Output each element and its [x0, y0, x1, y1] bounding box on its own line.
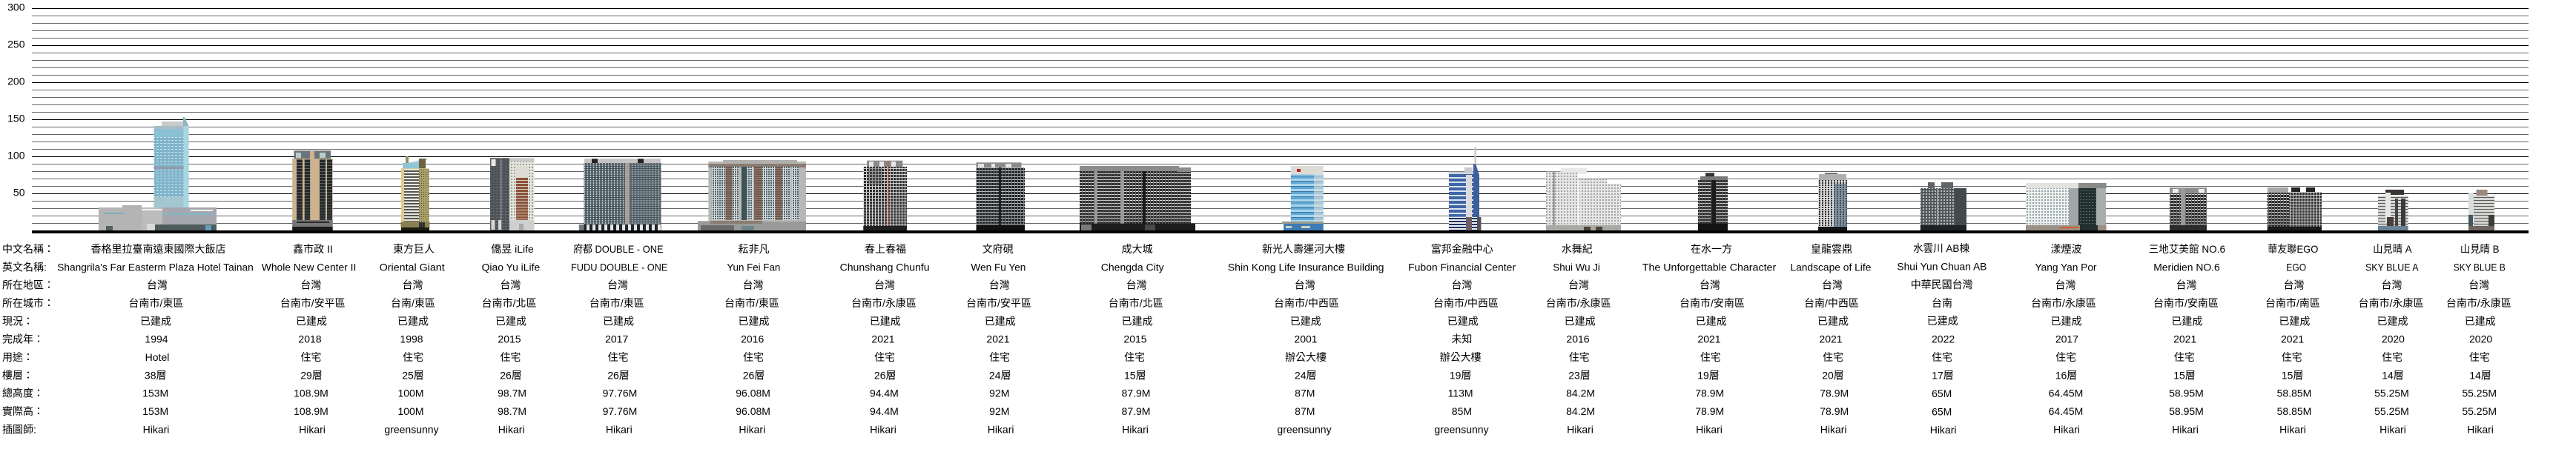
data column: 文府硯: 92M	[989, 387, 1009, 399]
data column: 山見晴 A: 台灣	[2382, 279, 2402, 291]
data column: 東方巨人: 1998	[400, 333, 423, 345]
building: Landscape of Life	[1818, 173, 1847, 230]
data column: 水舞紀: 2016	[1566, 333, 1590, 345]
data column: 成大城: 87.9M	[1122, 405, 1150, 417]
data column: 新光人壽運河大樓: 台南市/中西區	[1274, 297, 1339, 309]
data column: 耘非凡: 台灣	[743, 279, 764, 291]
table row labels: 插圖師:	[2, 423, 36, 435]
data column: 香格里拉臺南遠東國際大飯店: Shangrila's Far Easterm Plaza Hotel Tainan	[57, 261, 254, 273]
data column: 新光人壽運河大樓	[1228, 243, 1384, 435]
data column: 三地艾美館 NO.6: 已建成	[2171, 315, 2202, 327]
data column: 春上春福: 94.4M	[870, 387, 899, 399]
data column: 皇龍雲鼎: 78.9M	[1820, 387, 1849, 399]
data column: 華友聯EGO: 華友聯EGO	[2268, 243, 2318, 255]
data column: 春上春福: 26層	[874, 369, 896, 381]
data column: 府都 DOUBLE - ONE: 台灣	[607, 279, 628, 291]
data column: 富邦金融中心: 19層	[1450, 369, 1471, 381]
data column: 漾煙波: Yang Yan Por	[2035, 261, 2097, 273]
data column: 春上春福: 94.4M	[870, 405, 899, 417]
data column: 水舞紀: Hikari	[1567, 423, 1594, 435]
data column: 山見晴 B: 台灣	[2468, 279, 2489, 291]
data column: 耘非凡: Hikari	[739, 423, 765, 435]
data column: 皇龍雲鼎: 已建成	[1817, 315, 1849, 327]
data column: 漾煙波	[2031, 243, 2097, 435]
table row labels: 樓層：	[2, 369, 33, 381]
data column: 鑫市政 II: 住宅	[300, 351, 321, 363]
ground line	[32, 230, 2529, 233]
building: Shin Kong Life Insurance	[1282, 166, 1324, 230]
data column: 僑昱 iLife: 僑昱 iLife	[491, 243, 534, 255]
data column: 鑫市政 II: 108.9M	[294, 405, 328, 417]
building: Whole New Center II	[292, 150, 333, 230]
table row labels: 實際高：	[2, 405, 44, 417]
data column: 水舞紀	[1546, 243, 1611, 435]
data column: 香格里拉臺南遠東國際大飯店: 38層	[145, 369, 166, 381]
data column: 成大城: 住宅	[1124, 351, 1145, 363]
table row labels: 所在地區：	[2, 279, 54, 291]
data column: 在水一方: 2021	[1697, 333, 1721, 345]
data column: 水雲川 AB棟: 住宅	[1932, 351, 1952, 363]
data column: 華友聯EGO: 台南市/南區	[2265, 297, 2320, 309]
data column: 春上春福: 春上春福	[865, 243, 906, 255]
data column: 文府硯: 2021	[986, 333, 1010, 345]
data column: 水舞紀: 住宅	[1569, 351, 1590, 363]
building: Chunshang Chunfu	[863, 161, 907, 230]
data column: 水舞紀: 84.2M	[1566, 387, 1595, 399]
data column: 三地艾美館 NO.6	[2149, 243, 2225, 435]
data column: 三地艾美館 NO.6: 2021	[2173, 333, 2196, 345]
y axis labels: 150	[7, 112, 25, 124]
data column: 山見晴 A	[2359, 243, 2424, 435]
data column: 皇龍雲鼎	[1790, 243, 1872, 435]
data column: 山見晴 A: 14層	[2382, 369, 2404, 381]
table row labels: 所在城市：	[2, 297, 54, 309]
data column: 山見晴 A: 山見晴 A	[2373, 243, 2412, 255]
data column: 水雲川 AB棟: 17層	[1932, 370, 1954, 382]
data column: 漾煙波: 2017	[2055, 333, 2078, 345]
data column: 皇龍雲鼎: 20層	[1822, 369, 1844, 381]
data column: 華友聯EGO: 58.85M	[2277, 387, 2311, 399]
data column: 成大城: Hikari	[1122, 423, 1149, 435]
data column: 水雲川 AB棟: Hikari	[1930, 424, 1956, 436]
data column: 山見晴 B: 住宅	[2469, 351, 2490, 363]
building: Fubon Financial Center	[1449, 147, 1481, 230]
data column: 東方巨人: 已建成	[397, 315, 429, 327]
data column: 水舞紀: Shui Wu Ji	[1553, 261, 1600, 273]
data column: 春上春福: 台灣	[874, 279, 895, 291]
building: Meridien NO.6	[2170, 187, 2207, 230]
data column: 水舞紀: 台灣	[1568, 279, 1589, 291]
data column: 東方巨人: 100M	[397, 405, 424, 417]
data column: 漾煙波: 16層	[2055, 369, 2077, 381]
data column: 東方巨人: Oriental Giant	[380, 261, 445, 273]
data column: 文府硯: 已建成	[985, 315, 1016, 327]
data column: 華友聯EGO	[2265, 243, 2320, 435]
building: Chengda City	[1080, 166, 1195, 230]
data column: 皇龍雲鼎: 皇龍雲鼎	[1811, 243, 1852, 255]
data column: 春上春福: 台南市/永康區	[851, 297, 917, 309]
data column: 在水一方: 78.9M	[1695, 405, 1724, 417]
building: Wen Fu Yen	[976, 162, 1025, 230]
data column: 富邦金融中心: 富邦金融中心	[1431, 243, 1493, 255]
table row labels: 現況：	[2, 315, 33, 327]
data column: 三地艾美館 NO.6: 台灣	[2176, 279, 2196, 291]
data column: 富邦金融中心: 85M	[1452, 405, 1472, 417]
data column: 漾煙波: 台灣	[2055, 279, 2076, 291]
data column: 新光人壽運河大樓: 新光人壽運河大樓	[1262, 243, 1345, 255]
building: Shui Wu Ji	[1546, 168, 1621, 230]
data column: 水雲川 AB棟	[1897, 242, 1987, 436]
data column: 三地艾美館 NO.6: 住宅	[2174, 351, 2195, 363]
data column: 府都 DOUBLE - ONE: 台南市/東區	[589, 297, 644, 309]
data column: 水舞紀: 台南市/永康區	[1546, 297, 1611, 309]
data column: 富邦金融中心: 未知	[1451, 333, 1472, 345]
y axis labels: 200	[7, 75, 25, 87]
data column: 耘非凡: Yun Fei Fan	[727, 261, 780, 273]
table row labels: 英文名稱:	[2, 261, 47, 273]
data column: 僑昱 iLife: Qiao Yu iLife	[482, 261, 540, 273]
data column: 香格里拉臺南遠東國際大飯店: 台南市/東區	[129, 297, 183, 309]
data column: 僑昱 iLife: 98.7M	[498, 387, 526, 399]
data column: 僑昱 iLife: 26層	[500, 369, 522, 381]
data column: 華友聯EGO: Hikari	[2279, 423, 2306, 435]
data column: 府都 DOUBLE - ONE: Hikari	[606, 423, 633, 435]
data column: 文府硯: 文府硯	[982, 243, 1014, 255]
data column: 在水一方: 19層	[1697, 369, 1720, 381]
data column: 山見晴 A: 台南市/永康區	[2359, 297, 2424, 309]
data column: 鑫市政 II: 2018	[298, 333, 322, 345]
data column: 新光人壽運河大樓: 87M	[1295, 405, 1315, 417]
data column: 東方巨人	[380, 243, 445, 435]
data column: 水雲川 AB棟: 65M	[1932, 387, 1952, 399]
data column: 香格里拉臺南遠東國際大飯店: 已建成	[140, 315, 171, 327]
data column: 春上春福: 2021	[871, 333, 895, 345]
data column: 香格里拉臺南遠東國際大飯店: 153M	[142, 405, 168, 417]
data column: 耘非凡: 住宅	[743, 351, 764, 363]
y axis labels: 50	[13, 186, 25, 198]
data column: 山見晴 B: 2020	[2469, 333, 2492, 345]
data column: 水雲川 AB棟: 中華民國台灣	[1911, 279, 1973, 290]
data column: 府都 DOUBLE - ONE: 2017	[605, 333, 628, 345]
data column: 富邦金融中心: 台南市/中西區	[1433, 297, 1499, 309]
data column: 山見晴 A: 已建成	[2377, 315, 2408, 327]
data column: 新光人壽運河大樓: 台灣	[1295, 279, 1315, 291]
data column: 山見晴 B: 55.25M	[2462, 405, 2497, 417]
data column: 耘非凡: 台南市/東區	[724, 297, 779, 309]
data column: 水雲川 AB棟: 水雲川 AB棟	[1913, 242, 1969, 254]
building: FUDU DOUBLE - ONE	[579, 159, 661, 230]
data column: 山見晴 A: 55.25M	[2374, 387, 2409, 399]
data column: 文府硯: Wen Fu Yen	[971, 261, 1026, 273]
data column: 新光人壽運河大樓: 辦公大樓	[1285, 351, 1327, 363]
data column: 漾煙波: 漾煙波	[2051, 243, 2082, 255]
height grid lines	[32, 8, 2529, 224]
building: Yun Fei Fan	[698, 160, 806, 230]
data column: 成大城: 2015	[1123, 333, 1147, 345]
data column: 在水一方	[1642, 243, 1777, 435]
data column: 香格里拉臺南遠東國際大飯店: 153M	[142, 387, 168, 399]
data column: 僑昱 iLife: 住宅	[500, 351, 521, 363]
building: The Unforgettable Character	[1698, 173, 1728, 230]
data column: 香格里拉臺南遠東國際大飯店: 台灣	[147, 279, 168, 291]
building: SKY BLUE A	[2378, 190, 2408, 230]
data column: 春上春福: Hikari	[870, 423, 896, 435]
data column: 東方巨人: 東方巨人	[393, 243, 435, 255]
y axis labels	[7, 1, 25, 198]
data column: 三地艾美館 NO.6: 15層	[2173, 369, 2196, 381]
data column: 在水一方: 台南市/安南區	[1680, 297, 1745, 309]
data column: 在水一方: The Unforgettable Character	[1642, 261, 1777, 273]
data column: 皇龍雲鼎: Landscape of Life	[1790, 261, 1872, 273]
data column: 僑昱 iLife: 98.7M	[498, 405, 526, 417]
data column: 華友聯EGO: EGO	[2286, 261, 2306, 273]
data column: 文府硯: 92M	[989, 405, 1009, 417]
data column: 華友聯EGO: 15層	[2282, 369, 2303, 381]
data column: 富邦金融中心: 113M	[1448, 387, 1473, 399]
data column: 成大城: 成大城	[1121, 243, 1152, 255]
data column: 富邦金融中心: 台灣	[1451, 279, 1472, 291]
data column: 鑫市政 II	[262, 243, 356, 435]
data column: 鑫市政 II: Hikari	[299, 423, 326, 435]
data column: 耘非凡: 96.08M	[736, 387, 770, 399]
y axis labels: 100	[7, 149, 25, 161]
data column: 僑昱 iLife: 台南市/北區	[482, 297, 537, 309]
data column: 三地艾美館 NO.6: 三地艾美館 NO.6	[2149, 243, 2225, 255]
y axis labels: 300	[7, 1, 25, 13]
data column: 水舞紀: 84.2M	[1566, 405, 1595, 417]
data column: 成大城: 87.9M	[1122, 387, 1150, 399]
data column: 成大城: Chengda City	[1101, 261, 1164, 273]
data column: 山見晴 B	[2446, 243, 2511, 435]
data column: 水舞紀: 水舞紀	[1562, 243, 1593, 255]
data column: 在水一方: 在水一方	[1691, 243, 1732, 255]
data column: 山見晴 A: 住宅	[2382, 351, 2402, 363]
data column: 漾煙波: 已建成	[2051, 315, 2082, 327]
data column: 漾煙波: 台南市/永康區	[2031, 297, 2096, 309]
data column: 山見晴 B: 55.25M	[2462, 387, 2497, 399]
data column: 東方巨人: 台南/東區	[391, 297, 435, 309]
data column: 東方巨人: 住宅	[403, 351, 423, 363]
data column: 文府硯: 住宅	[989, 351, 1010, 363]
data column: 僑昱 iLife: 2015	[498, 333, 521, 345]
data column: 香格里拉臺南遠東國際大飯店: Hotel	[145, 351, 169, 363]
data column: 東方巨人: greensunny	[384, 423, 439, 435]
data column: 文府硯: 台灣	[989, 279, 1010, 291]
data column: 皇龍雲鼎: 台灣	[1822, 279, 1843, 291]
data column: 漾煙波: 住宅	[2055, 351, 2076, 363]
y axis labels: 250	[7, 38, 25, 50]
data column: 華友聯EGO: 58.85M	[2277, 405, 2311, 417]
data column: 成大城	[1101, 243, 1164, 435]
table row labels: 總高度：	[2, 387, 44, 399]
data column: 春上春福	[840, 243, 930, 435]
data column: 成大城: 台灣	[1126, 279, 1147, 291]
data column: 府都 DOUBLE - ONE: 住宅	[608, 351, 629, 363]
data column: 鑫市政 II: 108.9M	[294, 387, 328, 399]
data column: 僑昱 iLife: 台灣	[500, 279, 521, 291]
data column: 東方巨人: 台灣	[402, 279, 423, 291]
data column: 皇龍雲鼎: 78.9M	[1820, 405, 1849, 417]
data column: 漾煙波: 64.45M	[2049, 387, 2083, 399]
data column: 文府硯: Hikari	[988, 423, 1014, 435]
data column: 皇龍雲鼎: 住宅	[1823, 351, 1843, 363]
data column: 耘非凡: 耘非凡	[739, 243, 770, 255]
data column: 香格里拉臺南遠東國際大飯店	[57, 243, 254, 435]
data column: 耘非凡: 26層	[743, 369, 764, 381]
table row labels: 用途：	[2, 351, 33, 363]
data column: 山見晴 B: SKY BLUE B	[2454, 261, 2506, 273]
data column: 山見晴 B: 山見晴 B	[2460, 243, 2499, 255]
data column: 水雲川 AB棟: 65M	[1932, 405, 1952, 417]
table row labels: 中文名稱：	[2, 243, 54, 255]
data column: 文府硯: 台南市/安平區	[966, 297, 1031, 309]
data column: 春上春福: Chunshang Chunfu	[840, 261, 930, 273]
data column: 新光人壽運河大樓: 24層	[1295, 369, 1316, 381]
data column: 東方巨人: 25層	[402, 369, 424, 381]
data column: 耘非凡: 96.08M	[736, 405, 770, 417]
data column: 耘非凡: 2016	[741, 333, 764, 345]
data column: 文府硯: 24層	[989, 369, 1011, 381]
data column: 在水一方: 已建成	[1696, 315, 1727, 327]
data column: 鑫市政 II: 台灣	[300, 279, 321, 291]
data column: 成大城: 15層	[1124, 369, 1146, 381]
data column: 東方巨人: 100M	[397, 387, 424, 399]
data column: 新光人壽運河大樓: 已建成	[1290, 315, 1321, 327]
data column: 耘非凡	[724, 243, 780, 435]
data column: 華友聯EGO: 2021	[2281, 333, 2304, 345]
data column: 三地艾美館 NO.6: 台南市/安南區	[2153, 297, 2219, 309]
data column: 成大城: 已建成	[1121, 315, 1152, 327]
data column: 文府硯	[966, 243, 1031, 435]
data column: 山見晴 A: SKY BLUE A	[2365, 261, 2419, 273]
data column: 新光人壽運河大樓: Shin Kong Life Insurance Building	[1228, 261, 1384, 273]
data column: 香格里拉臺南遠東國際大飯店: 1994	[145, 333, 168, 345]
data column: 富邦金融中心: 辦公大樓	[1440, 351, 1482, 363]
data column: 府都 DOUBLE - ONE: 97.76M	[603, 387, 637, 399]
data column: 在水一方: 台灣	[1700, 279, 1720, 291]
data column: 三地艾美館 NO.6: 58.95M	[2169, 405, 2204, 417]
data column: 水雲川 AB棟: 已建成	[1927, 315, 1958, 327]
data column: 皇龍雲鼎: 台南/中西區	[1804, 297, 1859, 309]
data column: 鑫市政 II: 29層	[300, 369, 323, 381]
building: Shangri-La Far Eastern Plaza	[99, 117, 217, 230]
building: EGO	[2268, 187, 2322, 230]
data column: 春上春福: 已建成	[870, 315, 901, 327]
building: SKY BLUE B	[2468, 190, 2494, 230]
data column: 山見晴 A: Hikari	[2380, 423, 2406, 435]
data column: 鑫市政 II: 台南市/安平區	[280, 297, 346, 309]
data column: 府都 DOUBLE - ONE: 97.76M	[603, 405, 637, 417]
data column: 府都 DOUBLE - ONE: 已建成	[603, 315, 634, 327]
data column: 鑫市政 II: 鑫市政 II	[293, 243, 333, 255]
data column: 山見晴 A: 2020	[2382, 333, 2405, 345]
data column: 三地艾美館 NO.6: Meridien NO.6	[2153, 261, 2220, 273]
building: Qiao Yu iLife	[490, 158, 534, 230]
data column: 香格里拉臺南遠東國際大飯店: 香格里拉臺南遠東國際大飯店	[90, 243, 225, 255]
data column: 新光人壽運河大樓: 87M	[1295, 387, 1315, 399]
data column: 富邦金融中心: Fubon Financial Center	[1408, 261, 1516, 273]
data column: 富邦金融中心	[1408, 243, 1516, 435]
data column: 在水一方: 78.9M	[1695, 387, 1724, 399]
data column: 香格里拉臺南遠東國際大飯店: Hikari	[143, 423, 169, 435]
building: Shui Yun Chuan AB	[1921, 182, 1966, 230]
data column: 僑昱 iLife: 已建成	[495, 315, 526, 327]
data column: 富邦金融中心: greensunny	[1434, 423, 1489, 435]
data column: 水雲川 AB棟: 台南	[1932, 297, 1952, 309]
data column: 漾煙波: Hikari	[2053, 423, 2080, 435]
data column: 耘非凡: 已建成	[739, 315, 770, 327]
data column: 僑昱 iLife	[482, 243, 540, 435]
data column: 鑫市政 II: 已建成	[296, 315, 327, 327]
data column: 在水一方: Hikari	[1696, 423, 1723, 435]
data column: 皇龍雲鼎: Hikari	[1820, 423, 1847, 435]
table row labels	[2, 243, 54, 435]
building: Oriental Giant	[400, 156, 430, 230]
data column: 水雲川 AB棟: Shui Yun Chuan AB	[1897, 260, 1987, 272]
table row labels: 完成年：	[2, 333, 44, 345]
data column: 華友聯EGO: 已建成	[2279, 315, 2310, 327]
building: Yang Yan Por	[2026, 183, 2107, 230]
data column: 春上春福: 住宅	[874, 351, 895, 363]
data column: 山見晴 A: 55.25M	[2374, 405, 2409, 417]
data column: 成大城: 台南市/北區	[1109, 297, 1163, 309]
data column: 山見晴 B: Hikari	[2467, 423, 2494, 435]
data column: 富邦金融中心: 已建成	[1447, 315, 1479, 327]
data column: 水雲川 AB棟: 2022	[1932, 333, 1955, 345]
data column: 僑昱 iLife: Hikari	[498, 423, 525, 435]
data column: 府都 DOUBLE - ONE: FUDU DOUBLE - ONE	[571, 261, 667, 273]
data column: 新光人壽運河大樓: 2001	[1294, 333, 1318, 345]
data column: 新光人壽運河大樓: greensunny	[1277, 423, 1332, 435]
data column: 山見晴 B: 已建成	[2465, 315, 2496, 327]
data column: 華友聯EGO: 台灣	[2284, 279, 2305, 291]
data column: 府都 DOUBLE - ONE	[571, 243, 667, 435]
data column: 府都 DOUBLE - ONE: 府都 DOUBLE - ONE	[573, 243, 664, 255]
data column: 三地艾美館 NO.6: Hikari	[2172, 423, 2199, 435]
data column: 皇龍雲鼎: 2021	[1819, 333, 1843, 345]
data column: 山見晴 B: 台南市/永康區	[2446, 297, 2511, 309]
data column: 水舞紀: 已建成	[1565, 315, 1596, 327]
data column: 華友聯EGO: 住宅	[2282, 351, 2302, 363]
data column: 在水一方: 住宅	[1700, 351, 1721, 363]
data column: 府都 DOUBLE - ONE: 26層	[607, 369, 630, 381]
data column: 三地艾美館 NO.6: 58.95M	[2169, 387, 2204, 399]
data column: 漾煙波: 64.45M	[2049, 405, 2083, 417]
data column: 鑫市政 II: Whole New Center II	[262, 261, 356, 273]
data column: 山見晴 B: 14層	[2469, 369, 2491, 381]
data column: 水舞紀: 23層	[1568, 369, 1591, 381]
